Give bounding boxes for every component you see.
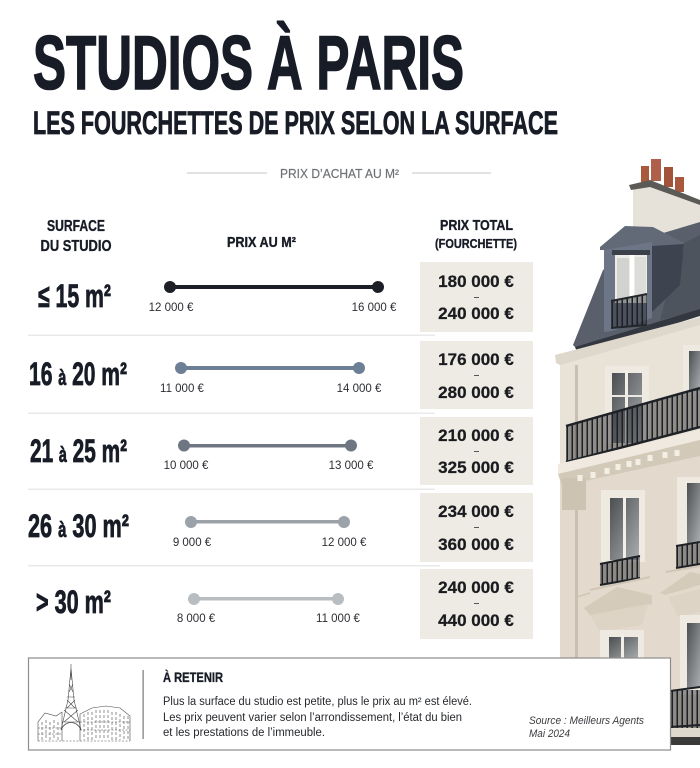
total price box	[420, 493, 533, 562]
pediments	[584, 572, 700, 632]
source: Source : Meilleurs Agents	[529, 715, 644, 727]
column header: surface du studio: SURFACE	[47, 218, 105, 235]
second floor windows	[601, 477, 700, 562]
third floor windows	[600, 615, 700, 695]
explanation text: Plus la surface du studio est petite, plus le prix au m² est élevé.	[163, 696, 472, 708]
column header: prix total	[435, 217, 517, 251]
total price box	[420, 341, 533, 409]
total price box: 240 000 €	[438, 304, 514, 323]
price range bar	[164, 440, 374, 472]
price range bar: 8 000 €	[177, 613, 216, 625]
price range bar: 12 000 €	[322, 537, 367, 549]
price range bar: 9 000 €	[173, 537, 212, 549]
section label: prix d'achat: PRIX D’ACHAT AU M²	[280, 166, 400, 181]
column header: prix au m2: PRIX AU M²	[227, 235, 296, 251]
total price box: 240 000 €	[438, 578, 514, 597]
row dividers	[28, 334, 440, 566]
price range bar	[149, 281, 397, 314]
price range bar: 12 000 €	[149, 302, 194, 314]
surface label: > 30 m²	[36, 584, 111, 620]
surface label: 16 à 20 m²	[29, 356, 127, 392]
surface label: ≤ 15 m²	[38, 278, 111, 314]
price range bar	[177, 593, 361, 625]
mansard roof	[573, 222, 700, 350]
divider	[142, 670, 144, 739]
explanation text: Les prix peuvent varier selon l’arrondissement, l’état du bien	[163, 712, 462, 724]
price range bar	[160, 362, 382, 395]
price range bar	[173, 516, 367, 549]
callout: à retenir	[28, 658, 670, 750]
column header: prix total: (FOURCHETTE)	[435, 236, 517, 251]
total price box: 176 000 €	[438, 350, 514, 369]
price range bar: 11 000 €	[160, 383, 205, 395]
explanation text: et les prestations de l’immeuble.	[163, 727, 325, 739]
heading: À RETENIR	[163, 670, 223, 685]
title: STUDIOS À PARIS	[33, 21, 464, 106]
icon: Eiffel tower and Paris rooftops sketch	[38, 664, 130, 741]
price range bar: 10 000 €	[164, 460, 209, 472]
dormer window	[600, 226, 684, 332]
row 2: 16 to 20 m2	[29, 341, 533, 409]
price range bar: 16 000 €	[352, 302, 397, 314]
facade	[560, 325, 700, 745]
total price box	[420, 262, 533, 332]
total price box: 210 000 €	[438, 426, 514, 445]
total price box: 234 000 €	[438, 502, 514, 521]
total price box: 440 000 €	[438, 611, 514, 630]
building photo: Haussmann facade	[555, 159, 700, 745]
row 1: up to 15 m2	[38, 262, 533, 332]
total price box: 360 000 €	[438, 535, 514, 554]
total price box	[420, 569, 533, 639]
column header: surface du studio: DU STUDIO	[40, 238, 112, 255]
total price box: 280 000 €	[438, 383, 514, 402]
column header: surface du studio	[40, 218, 112, 255]
surface label: 26 à 30 m²	[28, 508, 129, 544]
upper windows	[605, 345, 700, 444]
explanation text	[163, 696, 472, 739]
chimney	[629, 159, 700, 238]
price range bar: 14 000 €	[337, 383, 382, 395]
row 3: 21 to 25 m2	[30, 417, 533, 485]
source: Mai 2024	[529, 728, 570, 740]
total price box: 325 000 €	[438, 458, 514, 477]
price range bar: 11 000 €	[316, 613, 361, 625]
row 4: 26 to 30 m2	[28, 493, 533, 562]
price range bar: 13 000 €	[329, 460, 374, 472]
total price box: 180 000 €	[438, 272, 514, 291]
total price box	[420, 417, 533, 485]
column header: prix total: PRIX TOTAL	[440, 217, 513, 234]
third floor balcony	[670, 687, 700, 745]
source	[529, 715, 644, 740]
carved cornice	[558, 430, 700, 510]
row 5: over 30 m2	[36, 569, 533, 639]
second floor balconies	[577, 542, 700, 597]
surface label: 21 à 25 m²	[30, 433, 127, 469]
first floor balcony	[566, 387, 700, 463]
